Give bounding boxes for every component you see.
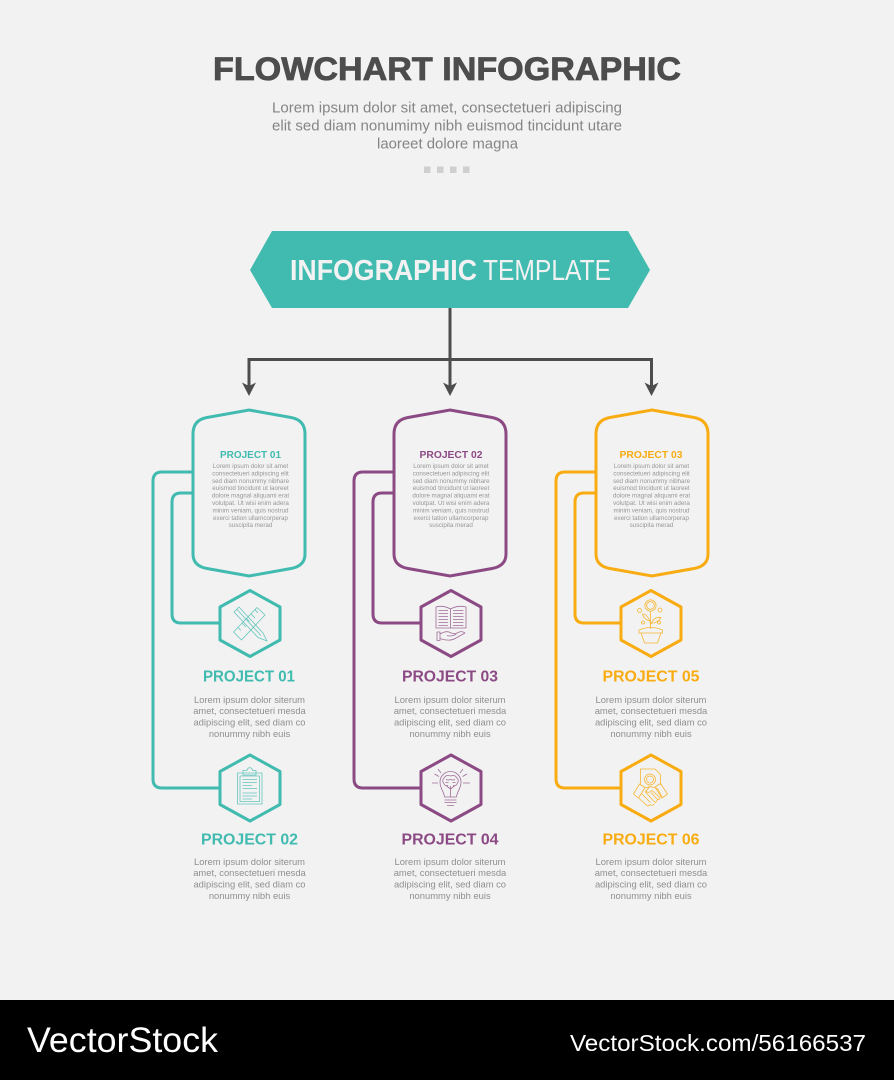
card: project 02: PROJECT 02 bbox=[420, 449, 483, 461]
description: project 01: amet, consectetueri mesda bbox=[193, 705, 307, 716]
panel: column 2 bbox=[354, 410, 507, 901]
subtitle text block: elit sed diam nonumimy nibh euismod tincidunt utare bbox=[272, 118, 622, 134]
card: project 01: exerci tation ullamcorperap bbox=[213, 515, 289, 522]
connector lines bbox=[354, 472, 421, 788]
card: project 02: euismod tincidunt ut laoreet bbox=[413, 485, 489, 492]
description: project 05: amet, consectetueri mesda bbox=[595, 705, 708, 716]
icon: clipboard bbox=[220, 755, 280, 821]
description: project 02: amet, consectetueri mesda bbox=[193, 867, 307, 878]
description: project 01 bbox=[193, 694, 307, 739]
card: project 01: euismod tincidunt ut laoreet bbox=[212, 485, 289, 492]
card: project 01: Lorem ipsum dolor sit amet bbox=[213, 463, 288, 470]
label: project 01: PROJECT 01 bbox=[203, 668, 295, 686]
banner: infographic template: INFOGRAPHIC bbox=[290, 255, 477, 287]
card: project 03: euismod tincidunt ut laoreet bbox=[613, 485, 690, 492]
card: project 02: volutpat. Ut wisi enim adera bbox=[413, 500, 490, 507]
card: project 01 bbox=[193, 410, 305, 576]
card: project 02: sed diam nonummy nibhare bbox=[412, 478, 490, 485]
description: project 01: nonummy nibh euis bbox=[209, 728, 290, 739]
card: project 01: sed diam nonummy nibhare bbox=[212, 478, 290, 485]
title: FLOWCHART INFOGRAPHIC bbox=[213, 51, 681, 87]
subtitle text block bbox=[272, 100, 622, 152]
card: project 02: suscipita merad bbox=[429, 522, 473, 529]
card: project 03: consectetueri adipiscing elit bbox=[613, 470, 690, 477]
card: project 03: exerci tation ullamcorperap bbox=[614, 515, 690, 522]
footer bar bbox=[0, 1000, 894, 1080]
description: project 03 bbox=[394, 694, 507, 739]
description: project 04: adipiscing elit, sed diam co bbox=[394, 878, 506, 890]
card: project 03: sed diam nonummy nibhare bbox=[613, 478, 691, 485]
description: project 05: adipiscing elit, sed diam co bbox=[595, 716, 707, 728]
banner: infographic template bbox=[250, 231, 650, 308]
description: project 06: adipiscing elit, sed diam co bbox=[595, 878, 707, 890]
panel: column 1 bbox=[153, 410, 307, 901]
description: project 01: adipiscing elit, sed diam co bbox=[193, 716, 306, 728]
card: project 02: consectetueri adipiscing elit bbox=[413, 470, 489, 477]
card: project 03: dolore magnal aliquami erat bbox=[613, 493, 690, 500]
label: project 03: PROJECT 03 bbox=[402, 668, 498, 686]
card: project 02: dolore magnal aliquami erat bbox=[412, 493, 490, 500]
description: project 05: Lorem ipsum dolor siterum bbox=[596, 694, 707, 705]
label: project 06: PROJECT 06 bbox=[602, 832, 700, 848]
card: project 03: PROJECT 03 bbox=[620, 449, 683, 461]
card: project 02: Lorem ipsum dolor sit amet bbox=[413, 463, 489, 470]
description: project 02 bbox=[193, 856, 307, 901]
icon: money plant bbox=[621, 590, 681, 656]
description: project 01: Lorem ipsum dolor siterum bbox=[194, 694, 305, 705]
description: project 05: nonummy nibh euis bbox=[610, 728, 692, 739]
arrows: banner to three cards bbox=[242, 308, 658, 396]
connector lines bbox=[153, 472, 220, 788]
card: project 02: minim veniam, quis nostrud bbox=[413, 507, 490, 514]
panel: column 3 bbox=[556, 410, 708, 901]
connector lines bbox=[556, 472, 621, 788]
decorative dots bbox=[424, 166, 470, 173]
card: project 01: dolore magnal aliquami erat bbox=[212, 493, 289, 500]
description: project 06: Lorem ipsum dolor siterum bbox=[596, 856, 707, 867]
card: project 03 bbox=[596, 410, 708, 576]
card: project 01: minim veniam, quis nostrud bbox=[212, 507, 289, 514]
icon: light bulb bbox=[421, 755, 481, 821]
card: project 01: consectetueri adipiscing elit bbox=[212, 470, 289, 477]
description: project 04 bbox=[394, 856, 507, 901]
icon: handshake and document bbox=[621, 755, 681, 821]
label: project 04: PROJECT 04 bbox=[402, 832, 499, 848]
description: project 05 bbox=[595, 694, 708, 739]
description: project 06: nonummy nibh euis bbox=[610, 890, 692, 901]
card: project 02 bbox=[394, 410, 506, 576]
description: project 03: Lorem ipsum dolor siterum bbox=[395, 694, 506, 705]
card: project 03: volutpat. Ut wisi enim adera bbox=[613, 500, 690, 507]
description: project 04: amet, consectetueri mesda bbox=[394, 867, 507, 878]
card: project 01: PROJECT 01 bbox=[220, 449, 281, 461]
card: project 03: Lorem ipsum dolor sit amet bbox=[614, 463, 689, 470]
subtitle text block: Lorem ipsum dolor sit amet, consectetueri adipiscing bbox=[272, 100, 622, 116]
description: project 06: amet, consectetueri mesda bbox=[595, 867, 708, 878]
banner: infographic template: TEMPLATE bbox=[483, 255, 611, 287]
footer bar: VectorStock.com/56166537 bbox=[570, 1030, 866, 1056]
card: project 02: exerci tation ullamcorperap bbox=[413, 515, 489, 522]
description: project 04: nonummy nibh euis bbox=[409, 890, 491, 901]
card: project 01: suscipita merad bbox=[229, 522, 273, 529]
description: project 04: Lorem ipsum dolor siterum bbox=[395, 856, 506, 867]
description: project 03: nonummy nibh euis bbox=[409, 728, 491, 739]
description: project 03: amet, consectetueri mesda bbox=[394, 705, 507, 716]
footer bar: VectorStock bbox=[27, 1021, 219, 1060]
icon: open book and hand bbox=[421, 590, 481, 656]
label: project 02: PROJECT 02 bbox=[201, 832, 298, 848]
subtitle text block: laoreet dolore magna bbox=[377, 136, 519, 152]
description: project 02: nonummy nibh euis bbox=[209, 890, 290, 901]
card: project 03: suscipita merad bbox=[630, 522, 674, 529]
description: project 02: Lorem ipsum dolor siterum bbox=[194, 856, 305, 867]
description: project 03: adipiscing elit, sed diam co bbox=[394, 716, 506, 728]
description: project 06 bbox=[595, 856, 708, 901]
description: project 02: adipiscing elit, sed diam co bbox=[193, 878, 306, 890]
icon: ruler and pencil bbox=[220, 590, 280, 656]
card: project 03: minim veniam, quis nostrud bbox=[613, 507, 690, 514]
card: project 01: volutpat. Ut wisi enim adera bbox=[212, 500, 289, 507]
label: project 05: PROJECT 05 bbox=[602, 668, 700, 686]
